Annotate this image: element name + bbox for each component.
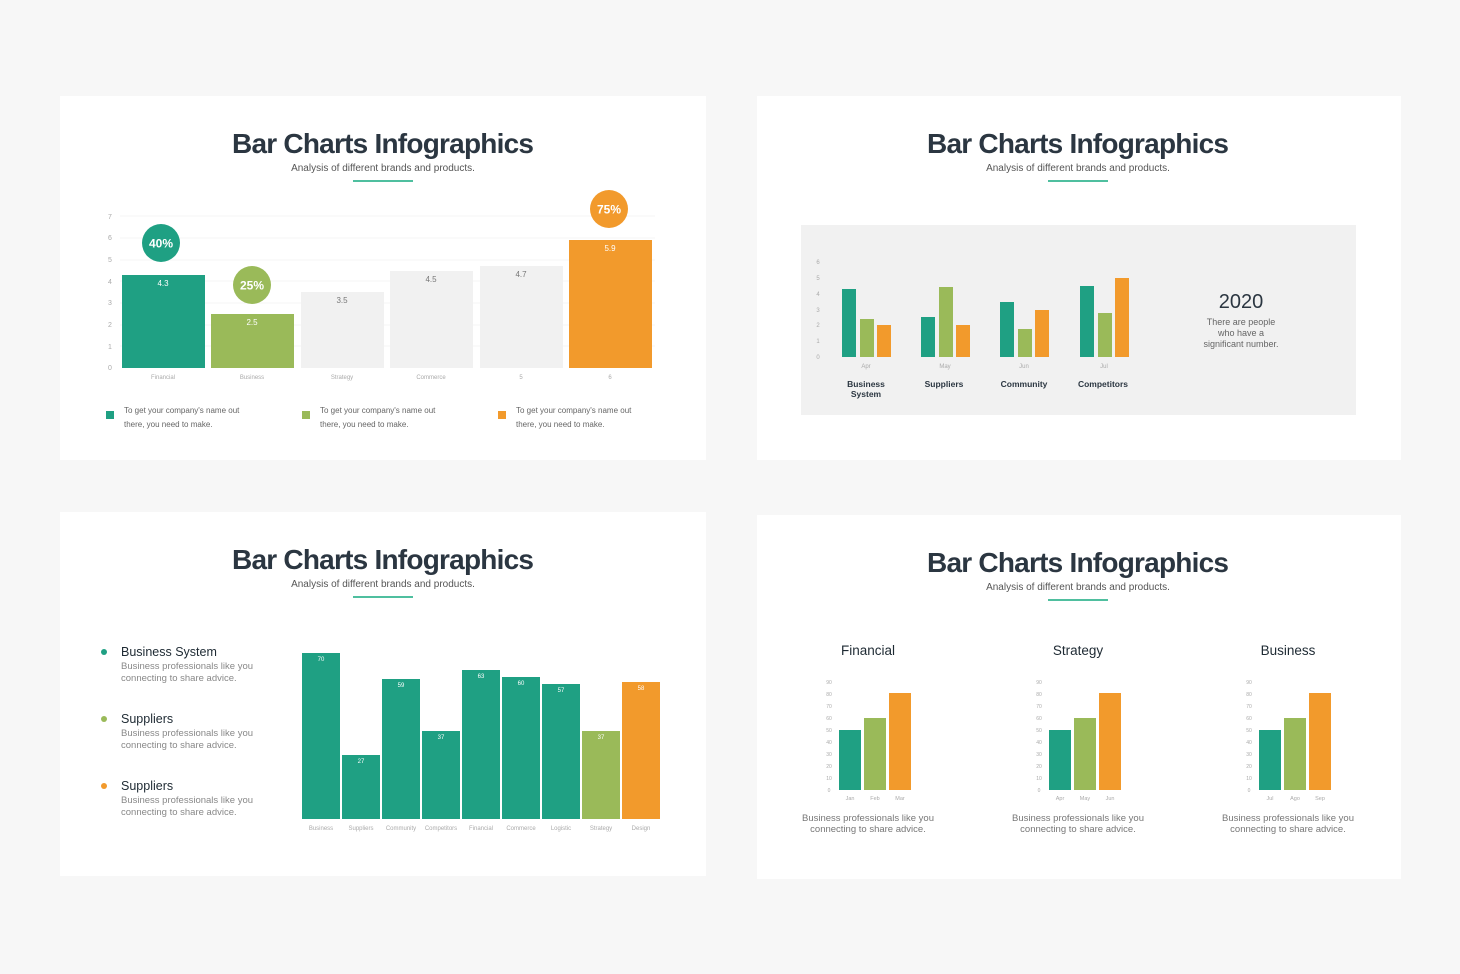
bar chart: 5 [519,375,523,381]
grouped bar chart: 4 [816,292,820,298]
list: Suppliers [121,779,173,793]
callout: 40%: 40% [149,236,173,250]
list: Business professionals like you [121,661,253,672]
bar chart: Commerce [506,826,536,832]
chart: Financial: 0 [828,788,831,794]
chart: Business: connecting to share advice. [1230,824,1346,835]
bar chart: 3 [108,300,112,307]
chart: Business: 40 [1246,740,1252,746]
chart: Financial: connecting to share advice. [810,824,926,835]
legend: there, you need to make. [124,420,212,429]
subtitle: Analysis of different brands and products. [291,579,475,590]
callout: 40% [142,224,180,262]
bar chart: 5 [108,257,112,264]
list: Business professionals like you [121,795,253,806]
chart: Financial [802,643,934,835]
legend: To get your company's name out [320,406,436,415]
chart: Financial: 40 [826,740,832,746]
text block: 2020: There are people [1207,317,1275,327]
chart: Strategy: May [1080,796,1090,802]
chart: Strategy: 50 [1036,728,1042,734]
chart: Strategy: 0 [1038,788,1041,794]
grouped bar chart: 0 [816,355,820,361]
chart: Business [1222,643,1354,835]
bar chart: Financial [151,375,175,381]
panel: card 4 [757,515,1401,879]
chart: Financial: 90 [826,680,832,686]
grouped bar chart: 3 [816,308,820,314]
chart: Strategy: 20 [1036,764,1042,770]
chart: Business: Sep [1315,796,1325,802]
text block: 2020 [1203,291,1279,349]
chart: Business: 20 [1246,764,1252,770]
list: connecting to share advice. [121,740,237,751]
chart: Financial: Business professionals like you [802,813,934,824]
chart: Business: 70 [1246,704,1252,710]
panel: card 2 [757,96,1401,460]
chart: Business: 0 [1248,788,1251,794]
bar chart: Commerce [416,375,446,381]
title: Bar Charts Infographics [232,544,534,575]
bar chart: 57 [558,688,565,694]
chart: Business: 50 [1246,728,1252,734]
bar chart: 0 [108,365,112,372]
bar chart: 37 [598,735,605,741]
bar chart: 58 [638,686,645,692]
chart: Financial: Mar [895,796,905,802]
text block: 2020: who have a [1217,328,1264,338]
chart: Business: Ago [1290,796,1300,802]
bar chart [302,653,660,832]
bar chart: 2.5 [246,318,258,327]
bar chart: Community [386,826,416,832]
chart: Financial: 20 [826,764,832,770]
list: Business System [121,645,217,659]
bar chart: Business [240,375,264,381]
bar chart: 6 [108,235,112,242]
bar chart [108,214,652,381]
grouped bar chart: 2 [816,323,820,329]
bar chart: 4.3 [157,279,169,288]
bar chart: 7 [108,214,112,221]
chart: Business: Business [1261,643,1316,658]
chart: Strategy: 10 [1036,776,1042,782]
grouped bar chart: Business [847,379,885,389]
chart: Business: 30 [1246,752,1252,758]
bar chart: Financial [469,826,493,832]
callout: 25%: 25% [240,278,264,292]
grouped bar chart: Community [1001,379,1048,389]
bar chart: Logistic [551,826,571,832]
bar chart: 4.7 [515,270,527,279]
legend [106,406,632,429]
list [101,645,253,818]
grouped bar chart: 5 [816,276,820,282]
title: Bar Charts Infographics [927,547,1229,578]
chart: Strategy: 60 [1036,716,1042,722]
bar chart: 63 [478,674,485,680]
grouped bar chart: Jun [1019,364,1029,370]
chart: Financial: Jan [846,796,854,802]
chart: Strategy: Jun [1106,796,1114,802]
legend: To get your company's name out [516,406,632,415]
legend: there, you need to make. [320,420,408,429]
title: Bar Charts Infographics [232,128,534,159]
callout: 75%: 75% [597,202,621,216]
bar chart: 3.5 [336,296,348,305]
chart: Business: Jul [1266,796,1274,802]
bar chart: 60 [518,681,525,687]
grouped bar chart: System [851,389,882,399]
legend: there, you need to make. [516,420,604,429]
panel: card 3 [60,512,706,876]
bar chart: Suppliers [348,826,374,832]
bar chart: 6 [608,375,612,381]
list: connecting to share advice. [121,807,237,818]
grouped bar chart: Jul [1100,364,1108,370]
chart: Business: 90 [1246,680,1252,686]
bar chart: 4.5 [425,275,437,284]
chart: Strategy: Apr [1056,796,1064,802]
title: Bar Charts Infographics [927,128,1229,159]
chart: Strategy: 80 [1036,692,1042,698]
chart: Strategy [1012,643,1144,835]
callout: 25% [233,266,271,304]
chart: Financial: 10 [826,776,832,782]
list: Suppliers [121,712,173,726]
grouped bar chart: May [939,364,951,370]
bar chart: Design [632,826,650,832]
chart: Strategy: 70 [1036,704,1042,710]
bar chart: 59 [398,683,405,689]
text block: 2020: 2020 [1219,291,1263,313]
chart: Financial: 60 [826,716,832,722]
chart: Financial: 80 [826,692,832,698]
chart: Financial: 30 [826,752,832,758]
bar chart: 37 [438,735,445,741]
list: Business professionals like you [121,728,253,739]
chart: Strategy: connecting to share advice. [1020,824,1136,835]
chart: Financial: 50 [826,728,832,734]
chart: Business: Business professionals like you [1222,813,1354,824]
grouped bar chart [816,260,1129,399]
chart: Strategy: 90 [1036,680,1042,686]
bar chart: 4 [108,279,112,286]
chart: Business: 10 [1246,776,1252,782]
text block: 2020: significant number. [1203,339,1279,349]
bar chart: 5.9 [604,244,616,253]
bar chart: 1 [108,344,112,351]
list: connecting to share advice. [121,673,237,684]
grouped bar chart: Competitors [1078,379,1128,389]
chart: Strategy: 40 [1036,740,1042,746]
chart: Business: 60 [1246,716,1252,722]
subtitle: Analysis of different brands and products. [291,163,475,174]
bar chart: Competitors [425,826,457,832]
callout: 75% [590,190,628,228]
chart: Strategy: Business professionals like you [1012,813,1144,824]
panel: card 1 [60,96,706,460]
chart: Strategy: Strategy [1053,643,1103,658]
bar chart: 70 [318,657,325,663]
bar chart: 27 [358,759,365,765]
chart: Business: 80 [1246,692,1252,698]
grouped bar chart: Suppliers [925,379,964,389]
legend: To get your company's name out [124,406,240,415]
chart: Strategy: 30 [1036,752,1042,758]
grouped bar chart: Apr [861,364,871,370]
grouped bar chart: 6 [816,260,820,266]
chart: Financial: 70 [826,704,832,710]
bar chart: Strategy [331,375,353,381]
chart: Financial: Feb [870,796,880,802]
grouped bar chart: 1 [816,339,820,345]
subtitle: Analysis of different brands and products. [986,163,1170,174]
chart: Financial: Financial [841,643,895,658]
subtitle: Analysis of different brands and products. [986,582,1170,593]
bar chart: Business [309,826,333,832]
bar chart: 2 [108,322,112,329]
bar chart: Strategy [590,826,612,832]
